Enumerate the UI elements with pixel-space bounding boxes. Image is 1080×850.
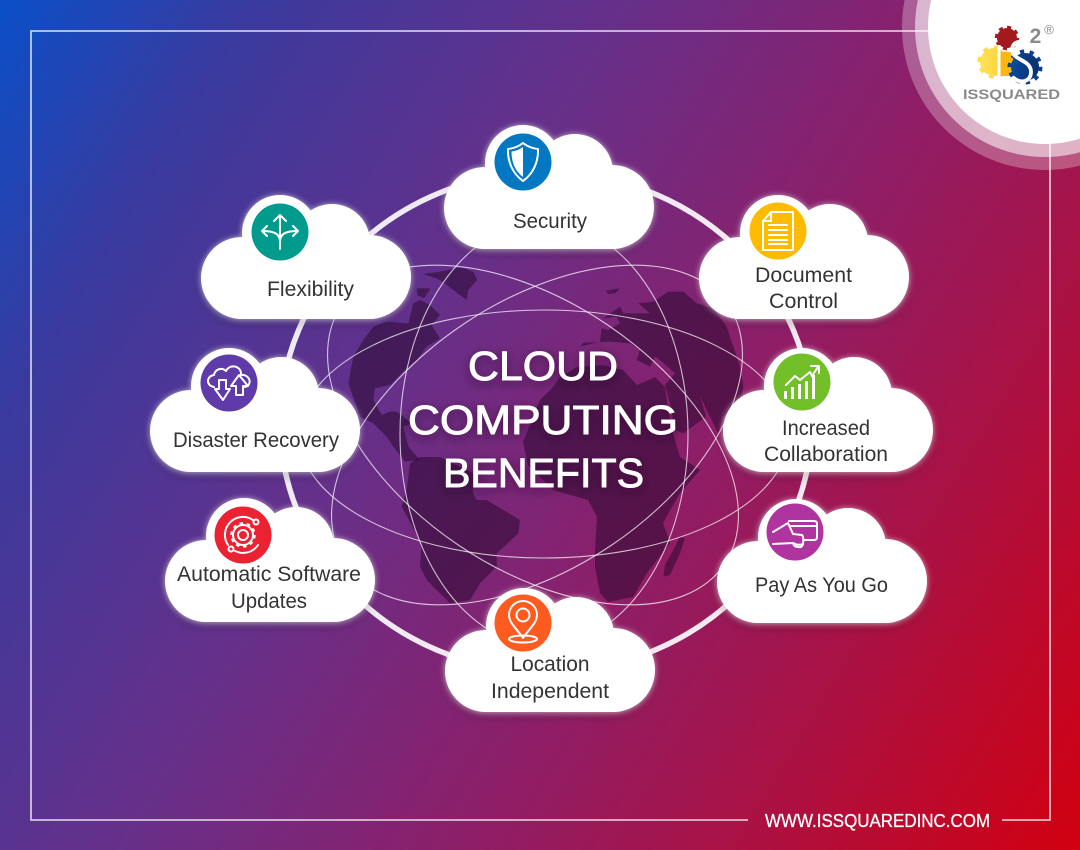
cloud: Security [444, 125, 654, 249]
label: Pay As You Go: Pay As You Go [755, 574, 888, 597]
logo badge [902, 0, 1080, 170]
cloud: Document Control: Control [769, 290, 838, 313]
connecting ring [280, 172, 812, 672]
map: Greenland and Arctic [417, 267, 477, 300]
label: Increased Collaboration: Increased [782, 417, 870, 440]
label: Disaster Recovery: Disaster Recovery [173, 429, 339, 452]
label: Document Control: Document [755, 264, 852, 287]
icon: document [750, 202, 806, 260]
cloud: Increased Collaboration [723, 348, 933, 472]
icon: growth chart [774, 354, 830, 410]
cloud: Flexibility [201, 195, 411, 319]
logo: white S and I mark [999, 42, 1031, 81]
orbit ellipses [267, 196, 803, 674]
logo: wordmark: ISSQUARED [963, 87, 1060, 102]
website url: WWW.ISSQUAREDINC.COM [765, 811, 990, 831]
icon: map pin [494, 594, 552, 652]
icon: branching arrows [252, 204, 308, 260]
map: North and Central America [348, 300, 440, 462]
map: Iceland [606, 288, 620, 294]
icon: cloud with up and down arrows [200, 354, 258, 412]
cloud: Disaster Recovery [150, 348, 360, 472]
map: Africa [523, 365, 700, 602]
cloud: Increased Collaboration: Collaboration [764, 443, 888, 466]
title: COMPUTING [408, 397, 678, 443]
title [408, 343, 678, 496]
map: South America [402, 457, 520, 603]
label: Security: Security [513, 210, 587, 233]
title: BENEFITS [443, 450, 644, 496]
cloud: Automatic Software Updates: Updates [231, 590, 307, 613]
label: Flexibility: Flexibility [267, 278, 354, 301]
world map silhouette [348, 267, 743, 603]
icon: hand holding card [766, 504, 824, 560]
label: Automatic Software Updates: Automatic Software [177, 563, 361, 586]
cloud: Location Independent: Independent [491, 680, 609, 703]
title: CLOUD [468, 343, 618, 389]
logo: blue gear [1010, 52, 1040, 82]
cloud: Location Independent [445, 588, 655, 712]
logo: red gear [996, 28, 1018, 48]
label: Location Independent: Location [510, 653, 590, 676]
logo: superscript 2: 2 [1030, 25, 1041, 48]
cloud: Document Control [699, 195, 909, 319]
icon: shield [494, 134, 552, 190]
map: Eurasia [580, 292, 743, 433]
icon: gear with orbit [214, 506, 272, 564]
logo: registered mark: ® [1044, 22, 1054, 37]
cloud: Pay As You Go [717, 499, 927, 623]
cloud: Automatic Software Updates [165, 498, 375, 622]
map: Madagascar [663, 537, 685, 577]
logo: yellow gear [980, 48, 1015, 76]
